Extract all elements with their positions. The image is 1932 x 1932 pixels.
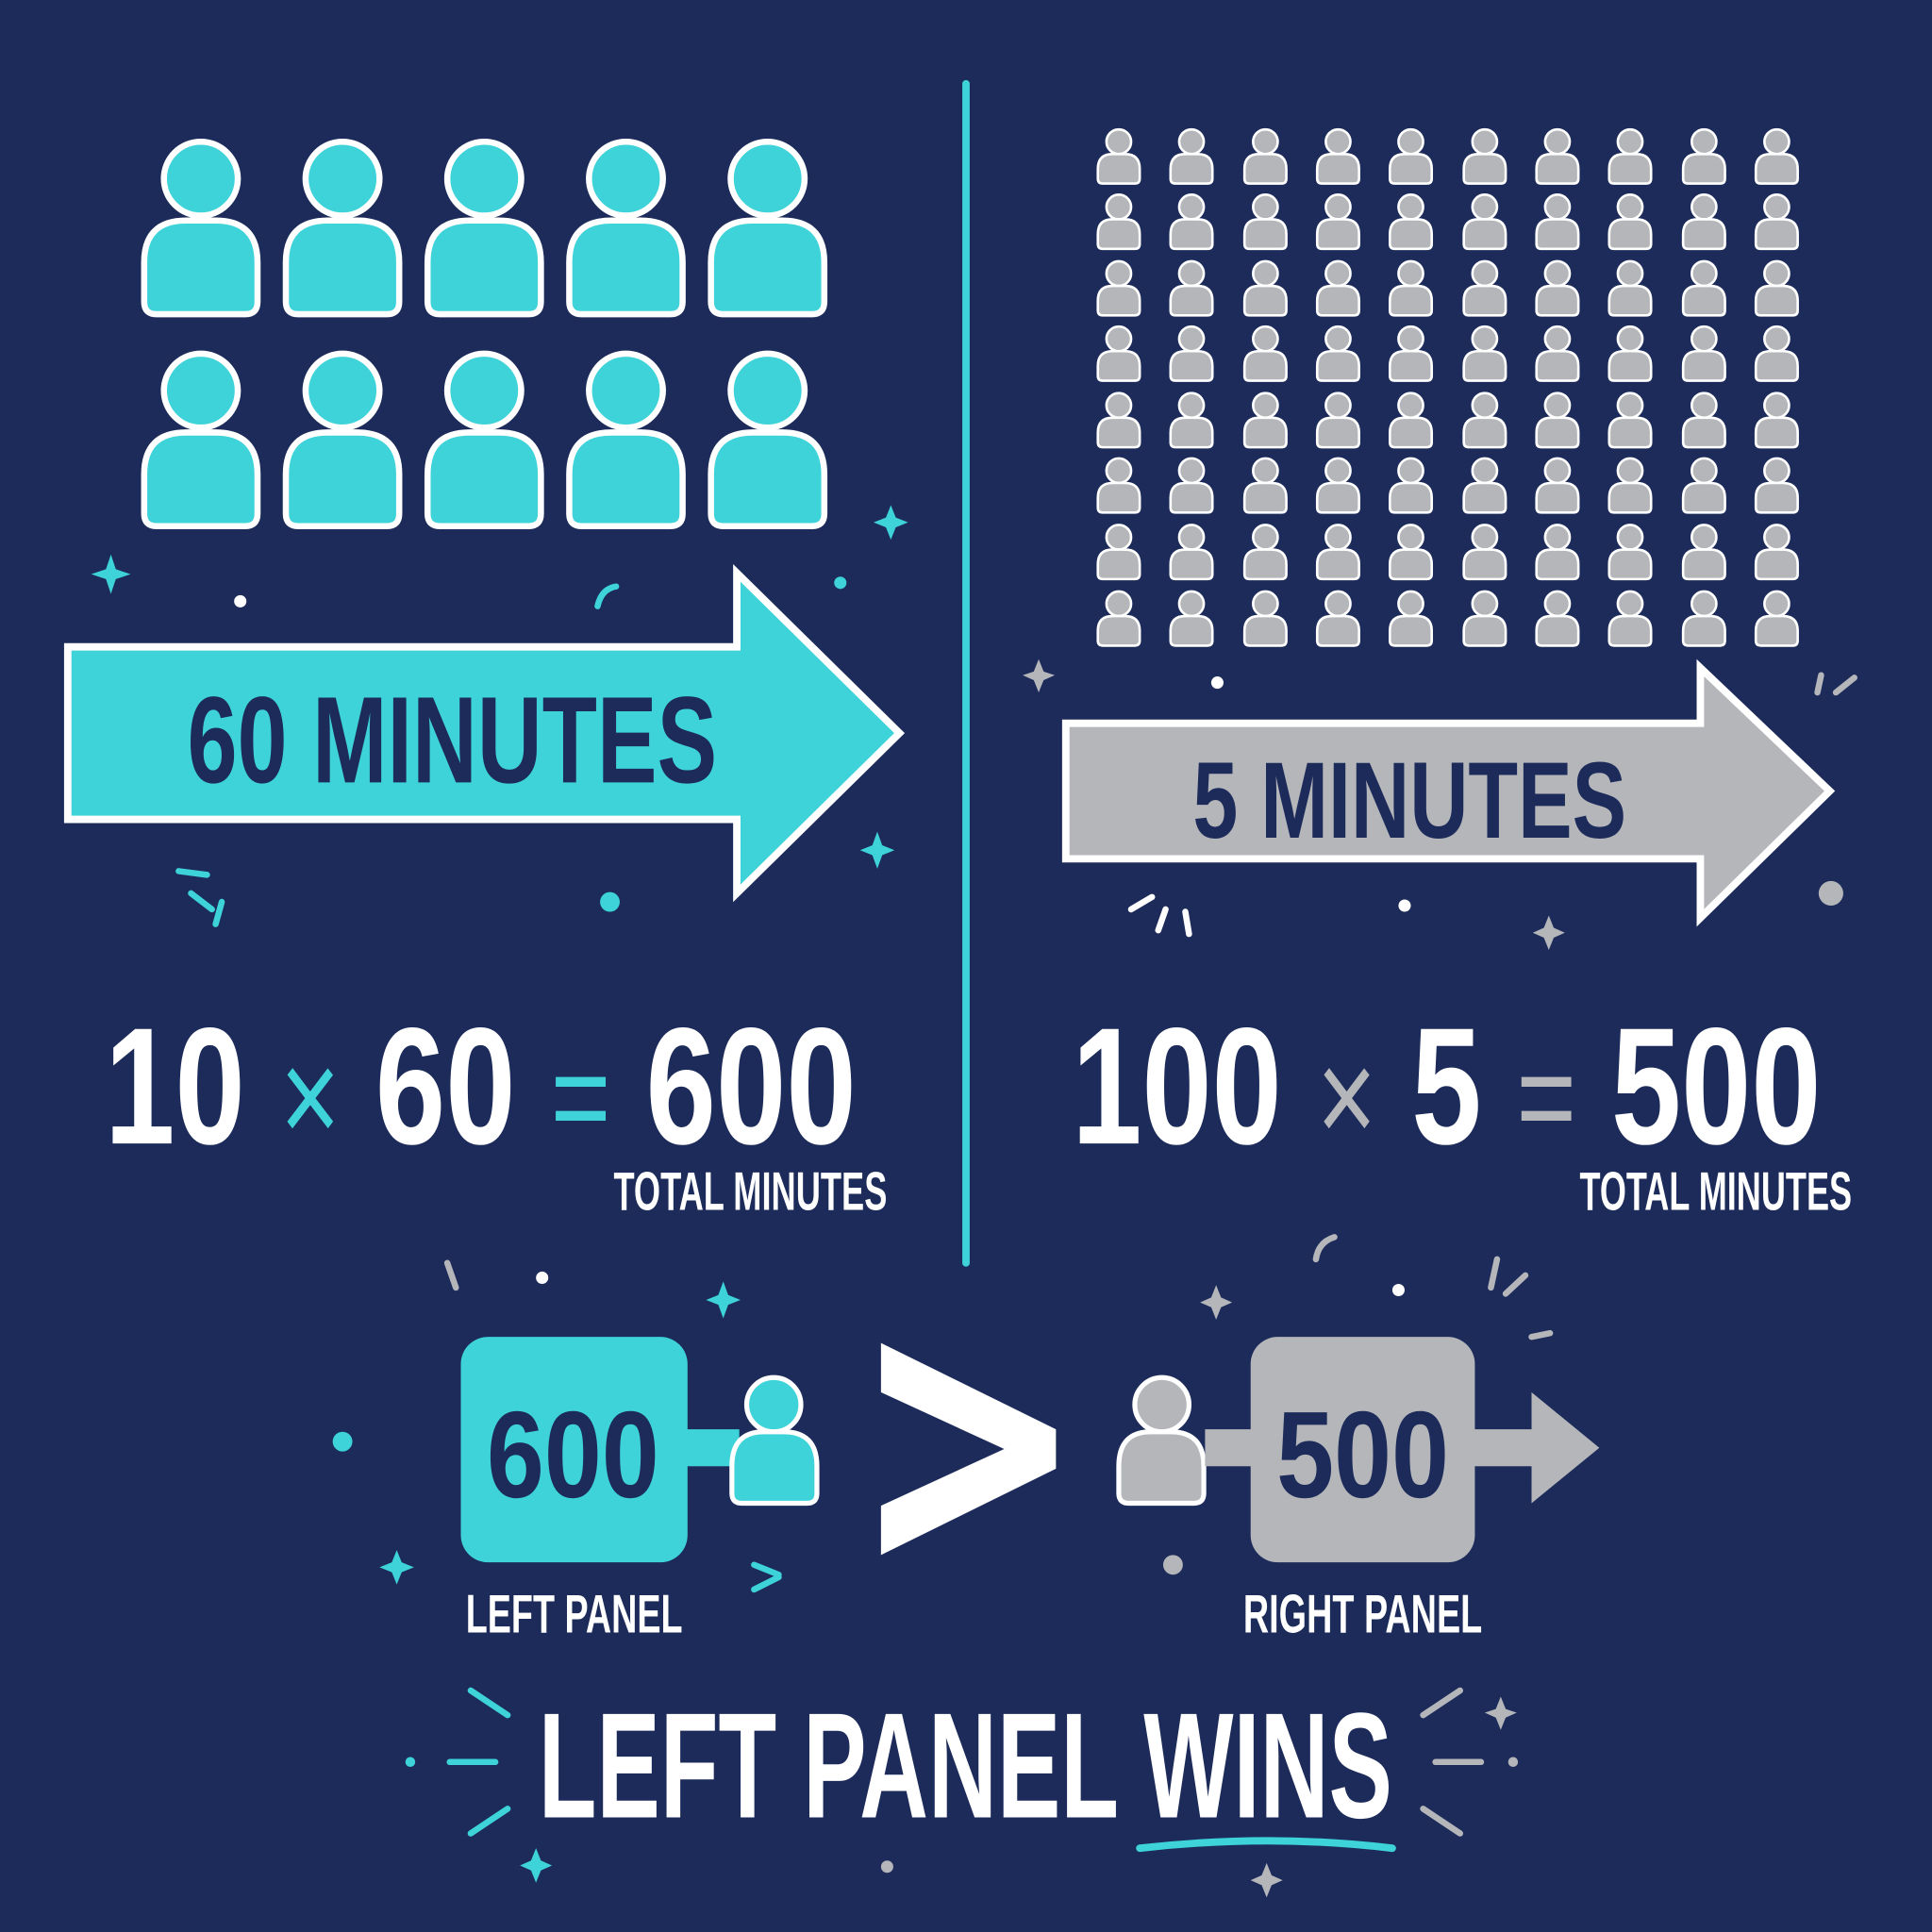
right arrow: 5 minutes: 5 MINUTES [1192,741,1626,861]
left equation: 10 × 60 = 600 [105,993,857,1179]
left people grid [144,142,824,526]
comparison: right 500: 500 [1276,1386,1449,1524]
headline: left panel wins [539,1682,1392,1850]
left equation: TOTAL MINUTES [613,1162,887,1223]
comparison: right 500: RIGHT PANEL [1243,1585,1482,1645]
comparison: left 600: LEFT PANEL [466,1585,683,1645]
decorations [178,587,1855,1834]
headline: left panel wins: LEFT PANEL WINS [539,1682,1392,1850]
right people grid [1098,129,1798,645]
comparison: left 600: 600 [487,1386,659,1524]
left arrow: 60 minutes [68,573,899,893]
divider [963,84,969,1263]
comparison: left 600 [460,1337,817,1645]
right equation: 100 × 5 = 500 [1072,993,1821,1179]
left arrow: 60 minutes: 60 MINUTES [188,671,717,808]
greater than sign [881,1343,1056,1555]
comparison: right 500 [1119,1337,1599,1645]
right arrow: 5 minutes [1066,668,1830,918]
